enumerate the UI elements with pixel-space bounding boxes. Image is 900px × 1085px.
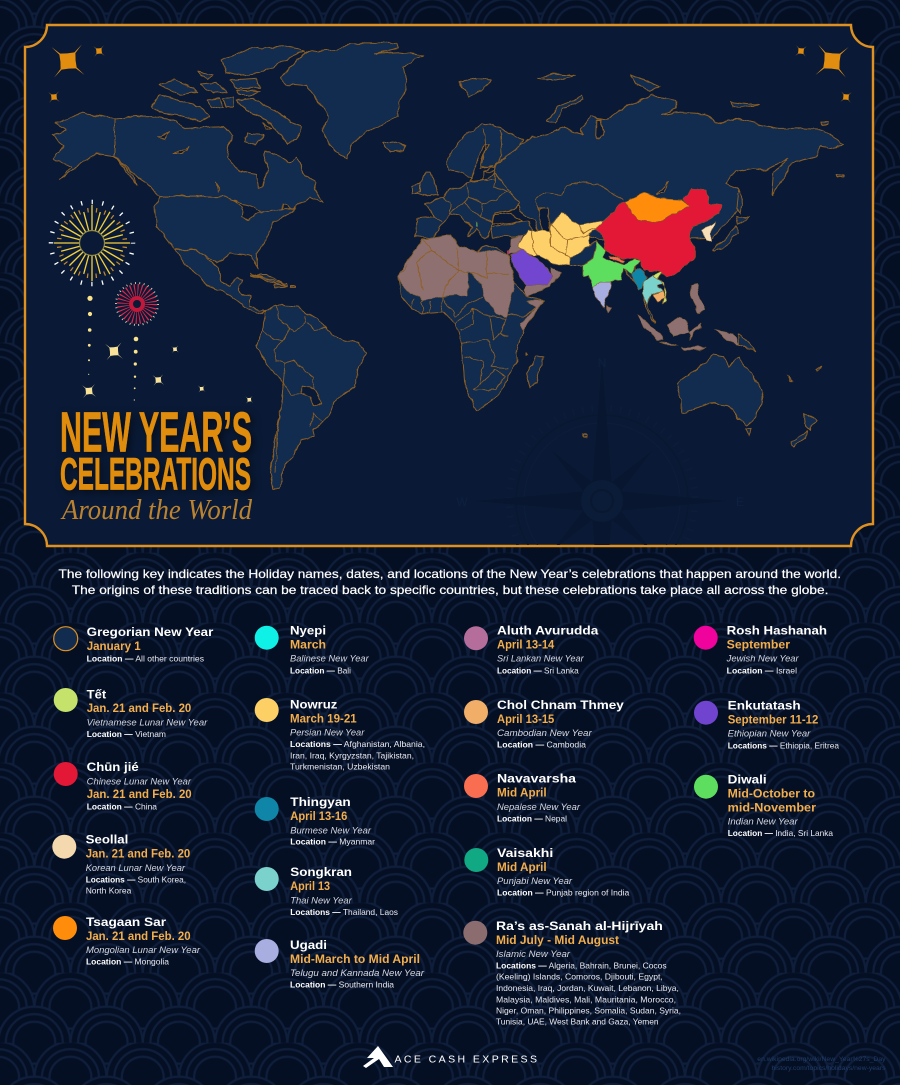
legend: Navavarsha <box>464 772 581 823</box>
legend: Seollal: Korean Lunar New Year <box>86 863 186 873</box>
legend: Diwali <box>694 772 833 838</box>
swatch <box>54 688 78 712</box>
swatch <box>464 774 488 798</box>
Islamic New Year countries <box>398 235 738 350</box>
legend: Nyepi: Nyepi <box>290 623 326 637</box>
legend: Navavarsha: Navavarsha <box>497 772 576 786</box>
legend: Gregorian New Year: January 1 <box>87 640 141 653</box>
legend: Diwali: Location — India, Sri Lanka <box>728 828 833 838</box>
legend: Ra's as-Sanah al-Hijriyah <box>463 919 681 1026</box>
legend: Nowruz: Locations — Afghanistan, Albania, <box>290 739 425 749</box>
legend: Tet: Tết <box>87 687 106 701</box>
legend: Chol Chnam Thmey: Location — Cambodia <box>497 740 586 750</box>
swatch <box>694 626 718 650</box>
firework: red <box>116 283 158 325</box>
Saudi Arabia <box>510 249 554 286</box>
icon: mountain A <box>363 1046 393 1068</box>
legend: Tsagaan Sar: Tsagaan Sar <box>86 915 166 929</box>
Cambodia <box>653 292 665 302</box>
legend: Songkran: Thai New Year <box>290 895 353 905</box>
swatch <box>255 867 279 891</box>
title: CELEBRATIONS <box>60 448 251 499</box>
legend: Songkran <box>255 865 398 917</box>
legend: Navavarsha: Nepalese New Year <box>497 802 581 812</box>
legend: Nowruz <box>255 697 425 772</box>
legend: Ugadi <box>255 938 425 990</box>
legend: Nowruz: March 19-21 <box>290 712 357 725</box>
swatch <box>255 698 279 722</box>
legend: Chol Chnam Thmey: Chol Chnam Thmey <box>497 698 624 712</box>
Europe and northern Asia <box>413 73 844 240</box>
legend: Diwali: Diwali <box>728 772 767 786</box>
compass rose: W <box>456 495 468 509</box>
sources: en.wikipedia.org/wiki/New_Year%27s_Day <box>757 1056 886 1063</box>
legend: Nyepi: Location — Bali <box>290 665 351 675</box>
Thailand and Laos <box>643 275 663 303</box>
legend: Diwali: mid-November <box>728 801 817 814</box>
legend: Tet: Vietnamese Lunar New Year <box>87 718 208 728</box>
logo: Ace Cash Express: ACE CASH EXPRESS <box>394 1054 537 1066</box>
legend: Seollal: Seollal <box>86 832 128 846</box>
legend: Tsagaan Sar: Jan. 21 and Feb. 20 <box>86 930 191 943</box>
title: Around the World <box>60 495 253 526</box>
compass rose: E <box>736 495 744 509</box>
sources: history.com/topics/holidays/new-years <box>772 1065 886 1072</box>
swatch <box>53 916 77 940</box>
swatch <box>52 835 76 859</box>
legend: Nowruz: Iran, Iraq, Kyrgyzstan, Tajikistan, <box>290 750 414 760</box>
legend: Thingyan: Thingyan <box>290 795 351 809</box>
legend: Seollal: Locations — South Korea, <box>86 874 186 884</box>
North America <box>52 43 422 287</box>
Albania <box>476 222 478 226</box>
legend: Rosh Hashanah: Rosh Hashanah <box>727 623 827 637</box>
legend: Nowruz: Turkmenistan, Uzbekistan <box>290 762 390 772</box>
logo: Ace Cash Express <box>363 1046 537 1068</box>
legend: Tsagaan Sar: Location — Mongolia <box>86 956 169 966</box>
legend: Nyepi: March <box>290 638 326 651</box>
legend: Aluth Avurudda: April 13-14 <box>497 639 555 652</box>
Korea <box>702 222 715 242</box>
Mongolia <box>625 193 690 223</box>
legend: Songkran: April 13 <box>290 880 331 893</box>
Central and South America <box>175 249 367 488</box>
firework trails <box>87 296 138 401</box>
Nowruz countries <box>518 213 607 265</box>
legend: Enkutatash: September 11-12 <box>728 713 818 726</box>
legend: Ra's as-Sanah al-Hijriyah: (Keeling) Islands, Comoros, Djibouti, Egypt, <box>496 972 663 982</box>
swatch <box>255 939 279 963</box>
legend: Enkutatash: Locations — Ethiopia, Eritrea <box>728 740 839 750</box>
legend: Aluth Avurudda: Location — Sri Lanka <box>497 665 579 675</box>
legend: Thingyan: Burmese New Year <box>290 825 372 835</box>
Nepal <box>608 255 623 263</box>
legend: Tsagaan Sar: Mongolian Lunar New Year <box>86 945 201 955</box>
legend: Thingyan: Location — Myanmar <box>290 836 375 846</box>
legend: Chun jie <box>54 760 192 811</box>
sources <box>757 1056 886 1072</box>
legend: Ugadi: Location — Southern India <box>290 980 394 990</box>
stars: around fireworks <box>76 335 256 407</box>
legend: Vaisakhi <box>464 846 630 898</box>
legend: Tet <box>54 687 208 739</box>
legend: Ugadi: Mid-March to Mid April <box>290 953 420 966</box>
legend: Gregorian New Year: Gregorian New Year <box>87 625 213 639</box>
legend: Enkutatash: Ethiopian New Year <box>728 729 811 739</box>
legend: Diwali: Mid-October to <box>728 787 815 800</box>
Africa and southern land <box>398 217 763 425</box>
swatch <box>54 762 78 786</box>
legend: Ugadi: Ugadi <box>290 938 327 952</box>
compass rose: N <box>598 356 606 370</box>
legend: Ra's as-Sanah al-Hijriyah: Ra’s as-Sanah al-Hijrīyah <box>496 919 663 933</box>
Southern India <box>593 282 612 307</box>
legend: Tet: Jan. 21 and Feb. 20 <box>87 702 191 715</box>
world map <box>52 43 844 488</box>
legend: Chun jie: Chūn jié <box>87 760 139 774</box>
legend: Nyepi <box>255 623 370 675</box>
legend: Chol Chnam Thmey: April 13-15 <box>497 713 555 726</box>
legend: Chol Chnam Thmey <box>464 698 624 750</box>
legend: Vaisakhi: Mid April <box>497 861 547 874</box>
Israel <box>508 250 509 253</box>
legend: Ra's as-Sanah al-Hijriyah: Locations — Algeria, Bahrain, Brunei, Cocos <box>496 960 667 970</box>
legend: Ra's as-Sanah al-Hijriyah: Tunisia, UAE, West Bank and Gaza, Yemen <box>496 1016 659 1026</box>
legend: Vaisakhi: Location — Punjab region of India <box>497 888 630 898</box>
legend: Rosh Hashanah: Jewish New Year <box>726 654 800 664</box>
legend: Navavarsha: Mid April <box>497 787 547 800</box>
Pacific islands <box>582 367 822 446</box>
legend: Aluth Avurudda: Aluth Avurudda <box>497 623 598 637</box>
legend: Songkran: Locations — Thailand, Laos <box>290 907 398 917</box>
intro text <box>58 567 841 597</box>
China <box>595 188 722 277</box>
legend: Rosh Hashanah <box>694 623 827 675</box>
swatch <box>694 775 718 799</box>
legend: Enkutatash <box>694 698 839 750</box>
title: NEW YEAR’S <box>60 401 252 465</box>
legend: Ra's as-Sanah al-Hijriyah: Niger, Oman, Philippines, Somalia, Sudan, Syria, <box>496 1005 681 1015</box>
intro text: The origins of these traditions can be traced back to specific countries, but these celebrations take place all across the globe. <box>72 583 828 597</box>
legend: Rosh Hashanah: Location — Israel <box>727 665 797 675</box>
Vietnam <box>653 272 667 303</box>
legend: Thingyan: April 13-16 <box>290 810 348 823</box>
swatch <box>464 848 488 872</box>
legend: Aluth Avurudda <box>464 623 598 675</box>
Myanmar <box>632 268 648 290</box>
stars: top right <box>790 31 862 108</box>
legend: Thingyan <box>255 795 375 846</box>
legend: Ra's as-Sanah al-Hijriyah: Indonesia, Iraq, Jordan, Kuwait, Lebanon, Libya, <box>496 983 679 993</box>
legend: Chun jie: Chinese Lunar New Year <box>87 776 192 786</box>
legend: Chol Chnam Thmey: Cambodian New Year <box>497 728 593 738</box>
legend: Ugadi: Telugu and Kannada New Year <box>290 968 425 978</box>
legend: Nyepi: Balinese New Year <box>290 654 370 664</box>
India <box>583 242 640 287</box>
legend: Rosh Hashanah: September <box>727 638 791 651</box>
legend: Seollal: Jan. 21 and Feb. 20 <box>86 848 190 861</box>
title <box>60 401 253 526</box>
legend: Ra's as-Sanah al-Hijriyah: Mid July - Mid August <box>496 934 619 947</box>
compass rose <box>456 358 744 545</box>
swatch <box>464 700 488 724</box>
swatch <box>464 626 488 650</box>
legend: Ra's as-Sanah al-Hijriyah: Islamic New Year <box>496 949 571 959</box>
legend: Seollal <box>52 832 190 896</box>
legend: Diwali: Indian New Year <box>728 816 799 826</box>
firework: yellow <box>51 202 133 284</box>
legend: Tsagaan Sar <box>53 915 201 966</box>
legend: Aluth Avurudda: Sri Lankan New Year <box>497 654 585 664</box>
panel: map frame <box>25 25 873 546</box>
swatch <box>255 626 279 650</box>
legend: Ra's as-Sanah al-Hijriyah: Malaysia, Maldives, Mali, Mauritania, Morocco, <box>496 994 676 1004</box>
legend: Seollal: North Korea <box>86 886 132 896</box>
legend: Nowruz: Nowruz <box>290 697 337 711</box>
swatch <box>694 701 718 725</box>
legend: Gregorian New Year: Location — All other countries <box>87 654 204 664</box>
swatch <box>255 797 279 821</box>
legend: Tet: Location — Vietnam <box>87 729 166 739</box>
legend: Vaisakhi: Vaisakhi <box>497 846 553 860</box>
legend: Songkran: Songkran <box>290 865 352 879</box>
stars: top left <box>38 31 110 108</box>
legend: Chun jie: Jan. 21 and Feb. 20 <box>87 788 192 801</box>
legend: Nowruz: Persian New Year <box>290 728 365 738</box>
legend: Vaisakhi: Punjabi New Year <box>497 876 573 886</box>
legend: Chun jie: Location — China <box>87 801 157 811</box>
swatch <box>54 627 78 651</box>
intro text: The following key indicates the Holiday names, dates, and locations of the New Year’s celebrations that happen around the world. <box>58 567 841 581</box>
highlighted countries by holiday <box>398 188 738 350</box>
legend: Enkutatash: Enkutatash <box>728 698 801 712</box>
legend: Navavarsha: Location — Nepal <box>497 813 567 823</box>
swatch <box>463 921 487 945</box>
legend: Gregorian New Year <box>54 625 213 664</box>
